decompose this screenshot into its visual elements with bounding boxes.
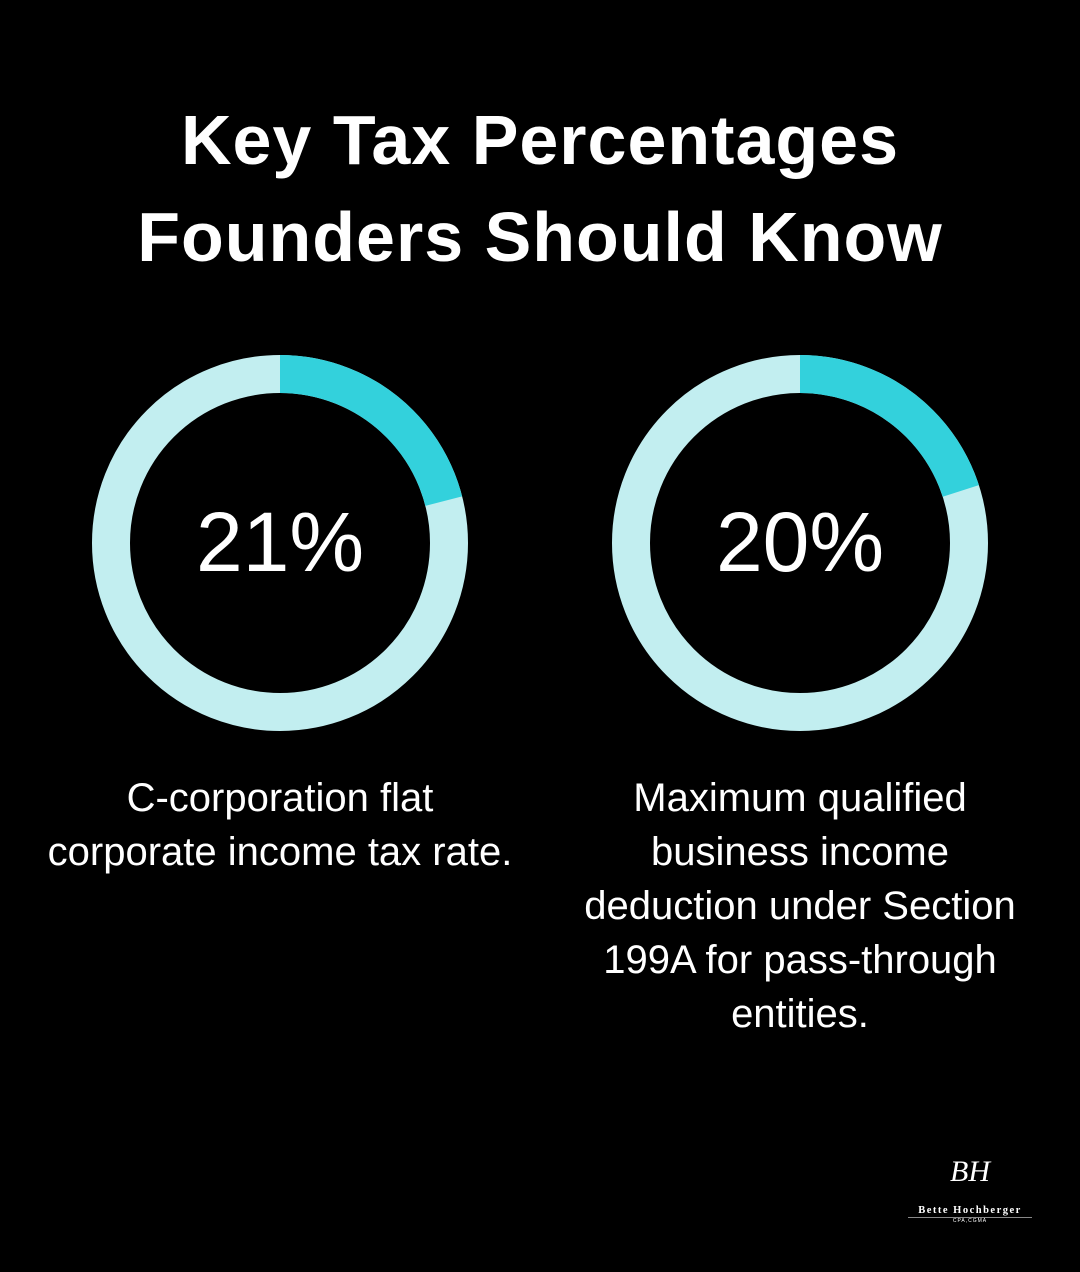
donut: 20% [612,355,988,731]
logo: BH [950,1155,990,1188]
text: right description: 199A for pass-through [603,938,997,982]
logo [908,1155,1032,1224]
text: right description: entities. [731,992,869,1036]
logo: CPA,CGMA [953,1218,987,1224]
text: right description: business income [651,830,949,874]
title [137,101,943,276]
title: Key Tax Percentages [181,101,899,179]
text: right description: Maximum qualified [633,776,967,820]
donut: 21% [92,355,468,731]
title: Founders Should Know [137,198,943,276]
text: left description: corporate income tax rate. [48,830,512,874]
text: left description [48,776,512,874]
donut: 21%: 21% [196,495,364,589]
text: right description [584,776,1016,1036]
text: right description: deduction under Section [584,884,1016,928]
text: left description: C-corporation flat [127,776,433,820]
logo: Bette Hochberger [918,1205,1022,1216]
donut: 20%: 20% [716,495,884,589]
